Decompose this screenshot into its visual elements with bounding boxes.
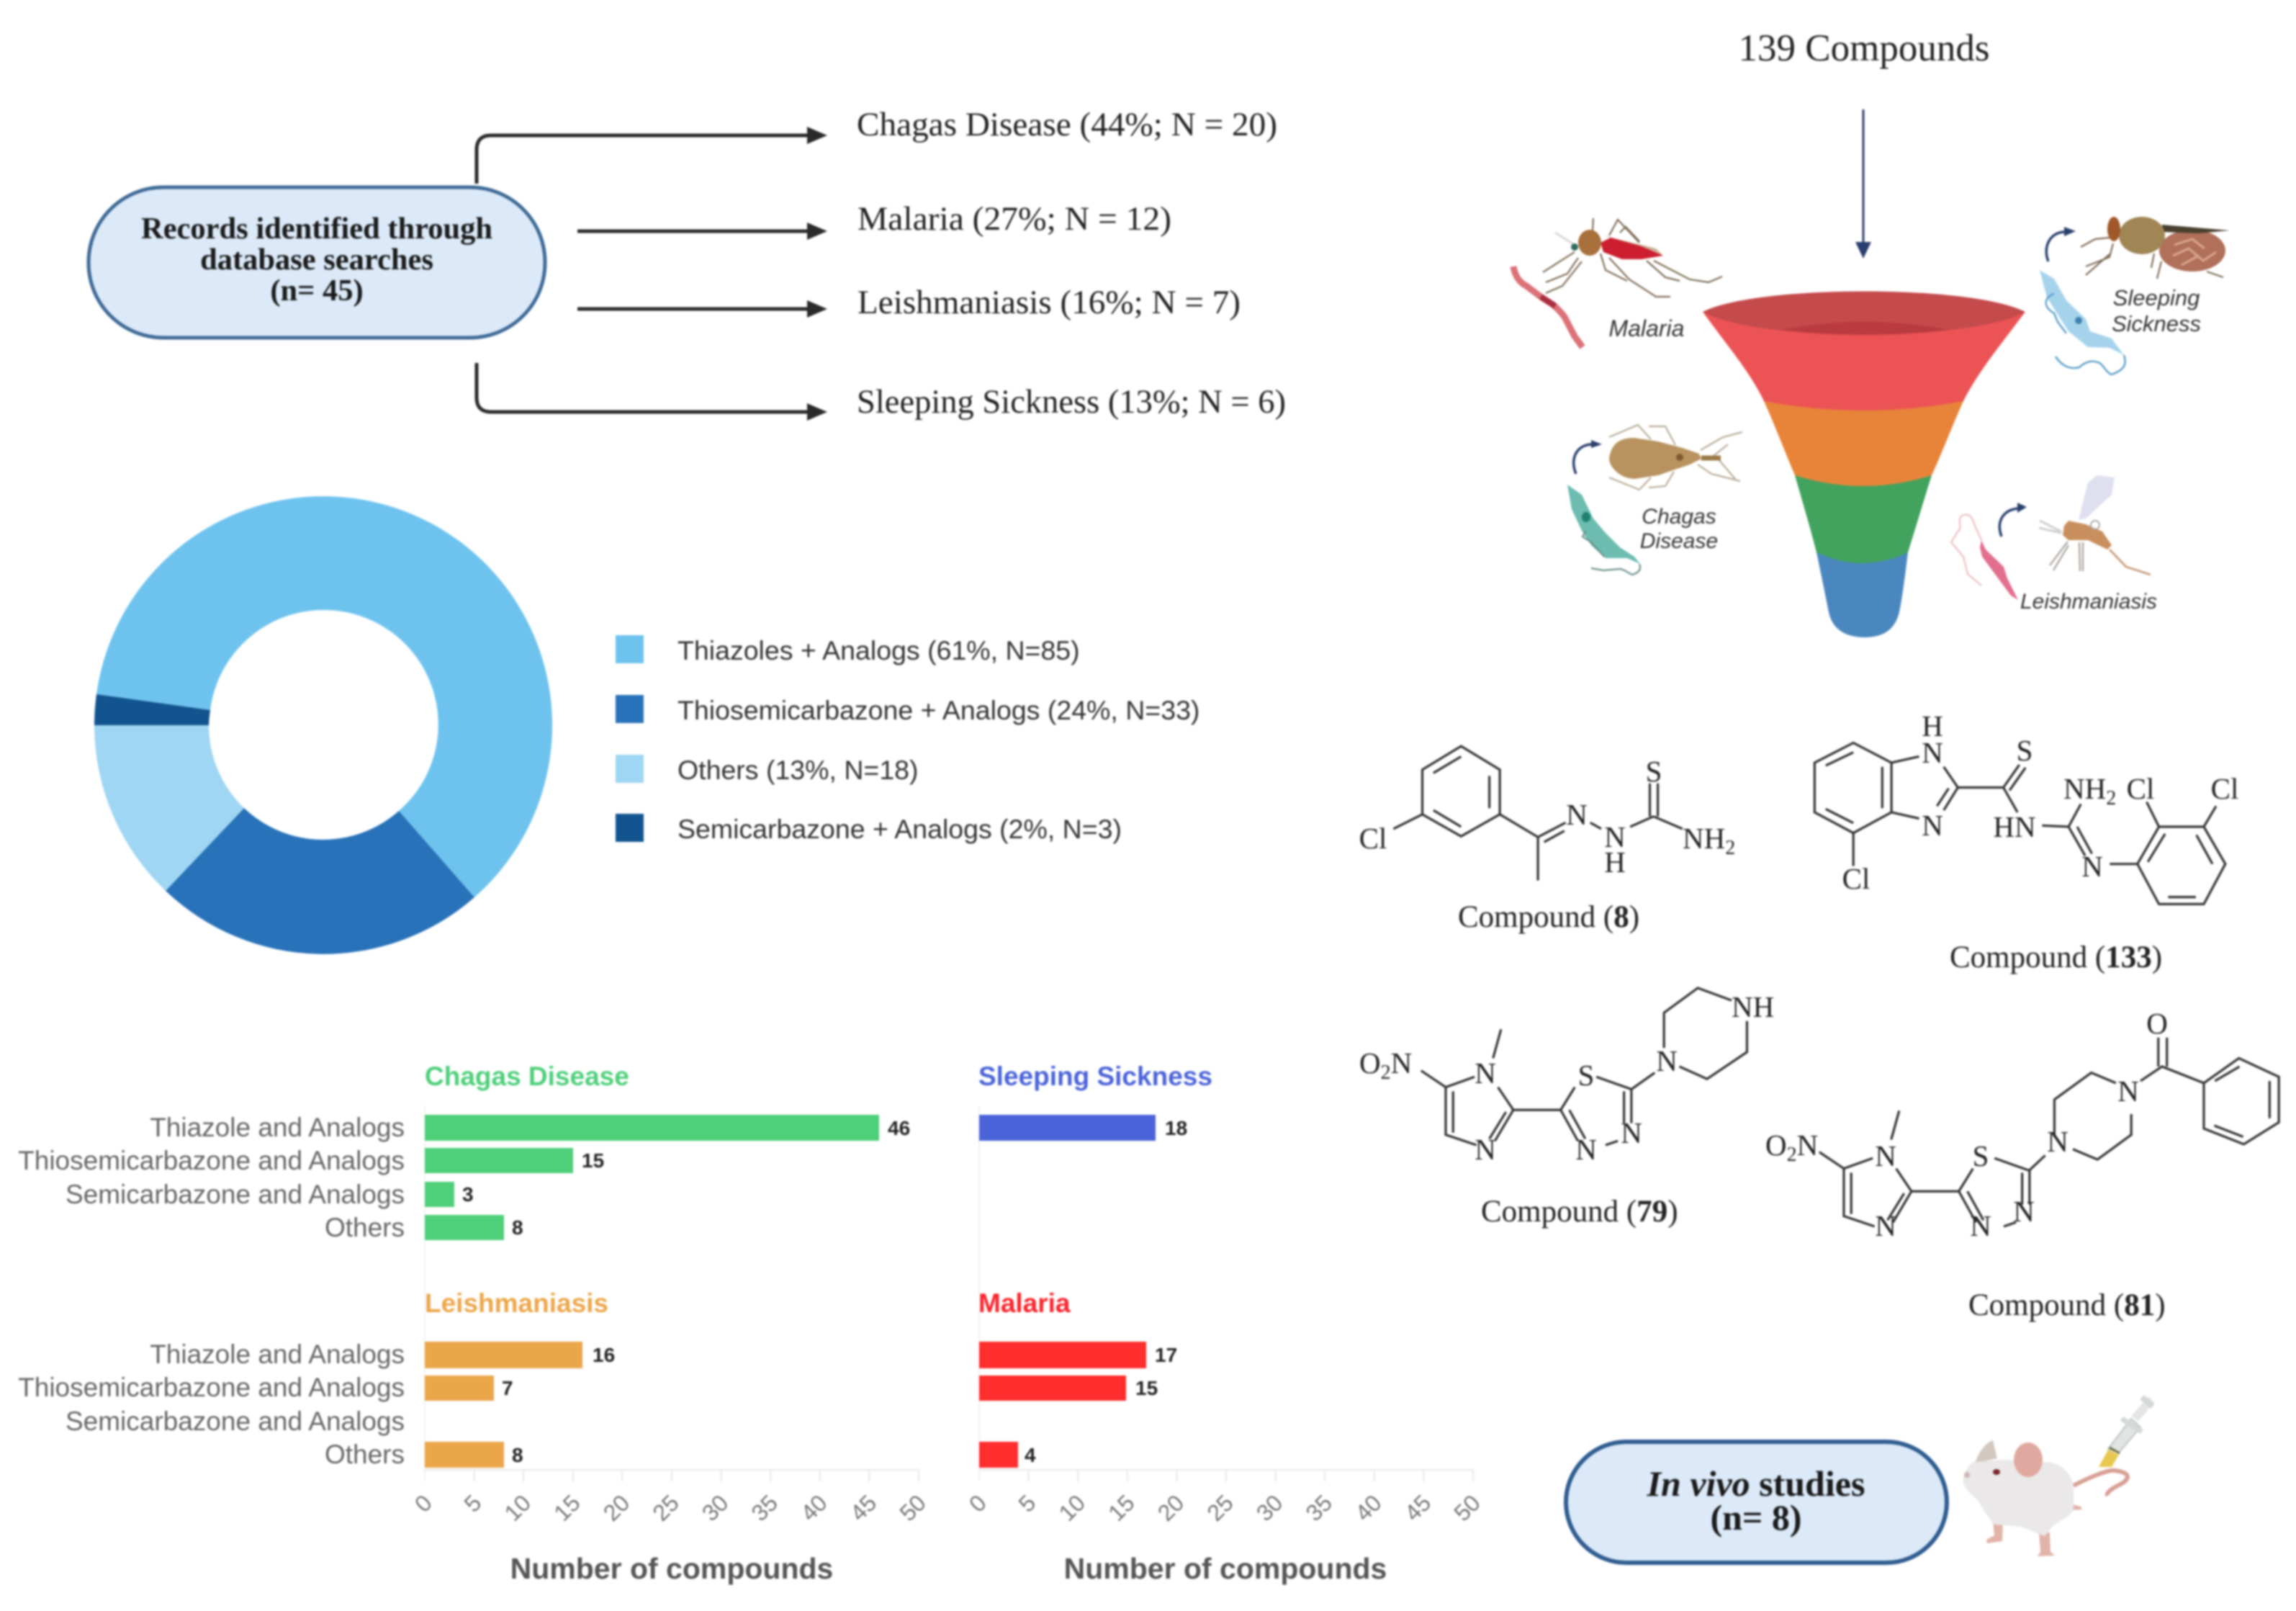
tsetse abdomen xyxy=(2159,230,2225,272)
structure: Compound 8 xyxy=(1359,746,1735,934)
atoms: Cl xyxy=(2211,772,2238,805)
trypanosome flagellum xyxy=(1583,531,1640,575)
arrowhead xyxy=(2064,227,2076,236)
value: Sleeping Sickness: 18 xyxy=(1165,1117,1187,1139)
label: Chagas Disease: Chagas Disease (44%; N = 20) xyxy=(857,106,1277,143)
atoms: S xyxy=(1646,755,1662,788)
parasite body xyxy=(1980,540,2018,600)
illustration: Sleeping Sickness vector xyxy=(2040,217,2230,374)
wings xyxy=(2079,475,2115,520)
atoms: 2 xyxy=(1725,837,1735,859)
axis tick labels: 15 xyxy=(549,1489,585,1526)
horizontal axis xyxy=(425,1470,919,1481)
trypanosome flagellum xyxy=(2046,294,2125,374)
axis tick labels: 40 xyxy=(1350,1489,1387,1526)
tsetse thorax xyxy=(2119,217,2165,254)
row labels: Chagas: Thiazole and Analogs xyxy=(150,1113,405,1142)
text: Sleeping: Sleeping xyxy=(2113,285,2200,310)
atoms: N xyxy=(1575,1133,1597,1166)
funnel xyxy=(1703,291,2025,637)
row labels: Leishmaniasis: Others xyxy=(325,1440,405,1469)
axis tick labels: 45 xyxy=(845,1489,881,1526)
axis tick labels: 30 xyxy=(697,1489,734,1526)
in vivo box: In vivo studies xyxy=(1647,1463,1865,1504)
nose xyxy=(1964,1472,1970,1478)
atoms: N xyxy=(2013,1195,2035,1228)
label: Leishmaniasis: Leishmaniasis (16%; N = 7) xyxy=(857,284,1241,321)
text: Malaria: Malaria xyxy=(1609,315,1684,341)
funnel: orange section xyxy=(1764,401,1963,486)
row labels: Chagas xyxy=(18,1113,405,1242)
legend swatch: Others xyxy=(616,755,644,783)
bug body xyxy=(1609,438,1701,479)
bar chart panel: right column xyxy=(964,1062,1485,1585)
segment: Others xyxy=(94,725,244,891)
heading: Leishmaniasis: Leishmaniasis xyxy=(425,1288,608,1318)
legend swatch: Semicarbazone xyxy=(616,814,644,842)
atoms: NH xyxy=(1732,990,1774,1023)
arrow xyxy=(2046,232,2064,261)
vertical axis xyxy=(978,1105,980,1481)
illustration: Malaria vector xyxy=(1513,218,1722,347)
sandfly tail xyxy=(2110,549,2151,575)
bug spot xyxy=(1676,454,1683,461)
abdomen pattern xyxy=(2173,239,2216,265)
bars: Leishmaniasis xyxy=(425,1342,582,1468)
eye xyxy=(1993,1469,2000,1475)
label: Sleeping Sickness: Sleeping Sickness (13%; N = 6) xyxy=(857,383,1286,421)
atoms: O xyxy=(1765,1128,1787,1162)
caption: Compound (79) xyxy=(1481,1195,1678,1229)
atoms: O xyxy=(2146,1007,2168,1040)
atoms: Cl xyxy=(1842,862,1870,895)
parasite dark band xyxy=(1541,297,1555,306)
axis tick labels: 35 xyxy=(1301,1489,1337,1526)
atoms: N xyxy=(2117,1074,2139,1108)
funnel: green section xyxy=(1795,475,1932,563)
syringe flange xyxy=(2122,1419,2142,1432)
bonds xyxy=(1393,746,1683,881)
near ear xyxy=(2014,1442,2043,1477)
axis tick labels: 30 xyxy=(1251,1489,1288,1526)
values: Leishmaniasis: 16 xyxy=(593,1344,615,1366)
atoms xyxy=(1359,755,1735,879)
legend text: Thiazoles: Thiazoles + Analogs (61%, N=85) xyxy=(677,635,1080,665)
atoms: NH xyxy=(2063,772,2106,805)
atoms: HN xyxy=(1993,810,2036,843)
atoms: NH xyxy=(1683,822,1725,855)
label: Malaria: Malaria (27%; N = 12) xyxy=(857,200,1171,238)
funnel: blue section xyxy=(1816,552,1908,637)
values: Leishmaniasis: 7 xyxy=(502,1377,513,1399)
syringe plunger xyxy=(2135,1399,2151,1419)
atoms: S xyxy=(1578,1059,1594,1092)
bar chart panel: left column xyxy=(18,1062,931,1585)
tsetse wing xyxy=(2162,225,2230,233)
bar: Sleeping Sickness xyxy=(979,1115,1156,1141)
mosquito legs xyxy=(1543,218,1722,297)
bonds xyxy=(1421,988,1747,1145)
atoms: N xyxy=(1391,1046,1412,1080)
bars: Chagas xyxy=(425,1115,879,1240)
axis tick labels: 20 xyxy=(1153,1489,1189,1526)
atoms: H xyxy=(1922,709,1943,742)
parasite: malaria xyxy=(1513,266,1583,347)
values: Malaria: 4 xyxy=(1025,1444,1036,1466)
atoms: O xyxy=(1359,1046,1381,1080)
arrow to Sleeping Sickness xyxy=(477,363,827,421)
bonds xyxy=(1814,743,2225,904)
values: Leishmaniasis xyxy=(502,1344,615,1466)
donut chart: compound classes xyxy=(94,496,552,954)
atoms: N xyxy=(1970,1209,1991,1242)
axis title: Number of compounds xyxy=(510,1552,833,1585)
axis tick labels: 10 xyxy=(500,1489,536,1526)
axis tick labels: 0 xyxy=(964,1489,991,1517)
antenna xyxy=(1555,233,1575,245)
donut legend xyxy=(616,635,1199,844)
tsetse legs xyxy=(2081,238,2223,279)
atoms: N xyxy=(2047,1125,2068,1158)
atoms xyxy=(1842,709,2238,895)
hind foot xyxy=(2038,1533,2055,1556)
atoms: 2 xyxy=(2106,787,2116,809)
row labels: Chagas: Semicarbazone and Analogs xyxy=(66,1180,405,1209)
atoms: N xyxy=(1797,1128,1818,1162)
syringe plunger top xyxy=(2142,1397,2153,1406)
structure: Compound 81 xyxy=(1765,1007,2279,1322)
heading: Sleeping Sickness: Sleeping Sickness xyxy=(978,1062,1212,1091)
axis tick labels xyxy=(410,1489,931,1526)
nucleus xyxy=(2075,317,2082,324)
row labels: Chagas: Thiosemicarbazone and Analogs xyxy=(18,1146,405,1175)
in vivo box xyxy=(1566,1442,1947,1563)
illustration: Leishmaniasis vector xyxy=(1951,475,2151,600)
values: Malaria xyxy=(1025,1344,1177,1466)
atoms: N xyxy=(2081,850,2103,883)
heading: Malaria: Malaria xyxy=(978,1288,1071,1318)
mouse body xyxy=(1963,1460,2074,1536)
segment: Semicarbazone xyxy=(94,694,210,725)
sandfly body xyxy=(2063,521,2112,549)
far ear xyxy=(1975,1440,1997,1463)
funnel: red section xyxy=(1703,312,2025,410)
atoms: S xyxy=(1973,1139,1989,1172)
syringe barrel xyxy=(2108,1419,2140,1453)
axis title: Number of compounds xyxy=(1064,1552,1387,1585)
axis tick labels: 25 xyxy=(647,1489,684,1526)
atoms: 2 xyxy=(1787,1144,1797,1166)
atoms xyxy=(1765,1007,2168,1242)
parasite flagellum xyxy=(1951,515,1981,585)
atoms: N xyxy=(1621,1116,1642,1149)
legend text: Thiosemicarbazone: Thiosemicarbazone + Analogs (24%, N=33) xyxy=(677,695,1199,725)
legend text: Semicarbazone: Semicarbazone + Analogs (2%, N=3) xyxy=(677,814,1122,844)
row labels: Leishmaniasis: Thiazole and Analogs xyxy=(150,1339,405,1369)
heading: 139 Compounds: 139 Compounds xyxy=(1739,27,1989,69)
atoms: N xyxy=(1604,820,1626,853)
axis tick labels: 5 xyxy=(459,1489,487,1517)
bonds: piperazine and benzoyl xyxy=(2030,1038,2279,1170)
mosquito head xyxy=(1571,243,1578,251)
row labels: Leishmaniasis: Semicarbazone and Analogs xyxy=(66,1406,405,1436)
tsetse head xyxy=(2107,217,2120,241)
atoms: N xyxy=(1656,1044,1678,1077)
axis tick labels xyxy=(964,1489,1485,1526)
atoms: Cl xyxy=(2127,772,2154,805)
syringe fluid xyxy=(2099,1450,2119,1467)
arrow into funnel xyxy=(1855,109,1871,259)
text: Disease: Disease xyxy=(1640,529,1718,553)
trypanosome body xyxy=(2040,270,2124,355)
caption: Compound (133) xyxy=(1950,941,2162,974)
text: Chagas: Chagas xyxy=(1642,505,1716,529)
sandfly legs xyxy=(2050,542,2083,571)
axis tick labels: 45 xyxy=(1400,1489,1436,1526)
axis tick labels: 50 xyxy=(1449,1489,1485,1526)
sandfly antennae xyxy=(2039,521,2061,533)
axis tick labels: 25 xyxy=(1202,1489,1238,1526)
atoms xyxy=(1359,990,1774,1166)
axis tick labels: 15 xyxy=(1103,1489,1140,1526)
panel: records flow diagram xyxy=(89,106,1286,421)
atoms: N xyxy=(1475,1133,1496,1166)
atoms: N xyxy=(1566,798,1588,831)
axis tick labels: 50 xyxy=(894,1489,931,1526)
text: Sickness: Sickness xyxy=(2112,311,2201,336)
axis tick labels: 40 xyxy=(796,1489,832,1526)
in vivo box: (n= 8) xyxy=(1710,1497,1802,1538)
values: Chagas: 3 xyxy=(462,1183,474,1206)
arrowhead xyxy=(1591,440,1602,448)
values: Leishmaniasis: 8 xyxy=(512,1444,523,1466)
arrow xyxy=(1999,508,2018,537)
values: Chagas xyxy=(462,1117,910,1239)
axis tick labels: 5 xyxy=(1014,1489,1041,1517)
tail xyxy=(2074,1471,2128,1496)
values: Chagas: 8 xyxy=(512,1216,523,1239)
arrow to Chagas Disease xyxy=(477,127,827,184)
illustration: Chagas vector xyxy=(1567,425,1742,575)
mosquito abdomen xyxy=(1601,238,1663,259)
atoms: H xyxy=(1604,845,1626,879)
funnel: rim xyxy=(1703,291,2025,334)
records box: database searches xyxy=(200,243,433,277)
hind foot small xyxy=(2070,1504,2082,1510)
axis tick labels: 20 xyxy=(598,1489,634,1526)
illustration: mouse with syringe xyxy=(1963,1397,2153,1556)
front foot xyxy=(1986,1521,2003,1543)
row labels: Leishmaniasis: Thiosemicarbazone and Analogs xyxy=(18,1373,405,1402)
trypanosome body xyxy=(1567,485,1640,564)
caption: Compound (81) xyxy=(1968,1288,2166,1322)
legend text: Others: Others (13%, N=18) xyxy=(677,755,919,785)
syringe band xyxy=(2110,1448,2120,1453)
atoms: N xyxy=(1875,1209,1896,1242)
bonds: heterocycles xyxy=(1819,1110,2030,1226)
funnel: inner opening xyxy=(1780,322,1949,335)
atoms: Cl xyxy=(1359,822,1387,855)
legend swatch: Thiazoles xyxy=(616,635,644,663)
atoms: N xyxy=(1475,1056,1496,1090)
axis tick labels: 35 xyxy=(747,1489,783,1526)
row labels: Leishmaniasis xyxy=(18,1339,405,1469)
atoms: N xyxy=(1922,809,1943,842)
structure: Compound 79 xyxy=(1359,988,1774,1229)
arrow to Malaria xyxy=(577,223,827,240)
records box: Records identified through xyxy=(141,212,492,246)
axis tick labels: 10 xyxy=(1054,1489,1090,1526)
nucleus xyxy=(1582,512,1590,522)
arrowhead xyxy=(2017,503,2027,513)
values: Chagas: 46 xyxy=(888,1117,910,1139)
structure: Compound 133 xyxy=(1814,709,2238,974)
atoms: S xyxy=(2017,734,2032,767)
segment: Thiosemicarbazone xyxy=(166,808,474,954)
arrow to Leishmaniasis xyxy=(577,300,827,318)
legend swatch: Thiosemicarbazone xyxy=(616,695,644,723)
heading: Chagas Disease: Chagas Disease xyxy=(425,1062,629,1091)
row labels: Chagas: Others xyxy=(325,1213,405,1242)
vertical axis xyxy=(424,1105,426,1481)
horizontal axis xyxy=(979,1470,1474,1481)
records box xyxy=(89,187,545,338)
bug head xyxy=(1701,455,1721,461)
values: Chagas: 15 xyxy=(582,1149,604,1172)
mosquito wing xyxy=(1603,235,1663,256)
axis tick labels: 0 xyxy=(410,1489,437,1517)
values: Malaria: 15 xyxy=(1135,1377,1158,1399)
values: Malaria: 17 xyxy=(1155,1344,1177,1366)
atoms: N xyxy=(1875,1139,1896,1172)
arrow xyxy=(1574,444,1591,474)
segment: Thiazoles xyxy=(96,496,552,897)
atoms: 2 xyxy=(1381,1062,1391,1084)
bars: Malaria xyxy=(979,1342,1146,1468)
mosquito thorax xyxy=(1578,230,1601,256)
caption: Compound (8) xyxy=(1458,900,1639,934)
bug legs xyxy=(1609,425,1742,490)
records box: (n= 45) xyxy=(270,274,364,308)
text: Leishmaniasis: Leishmaniasis xyxy=(2020,590,2157,614)
atoms: N xyxy=(1922,736,1943,769)
sandfly loop xyxy=(2091,521,2099,529)
